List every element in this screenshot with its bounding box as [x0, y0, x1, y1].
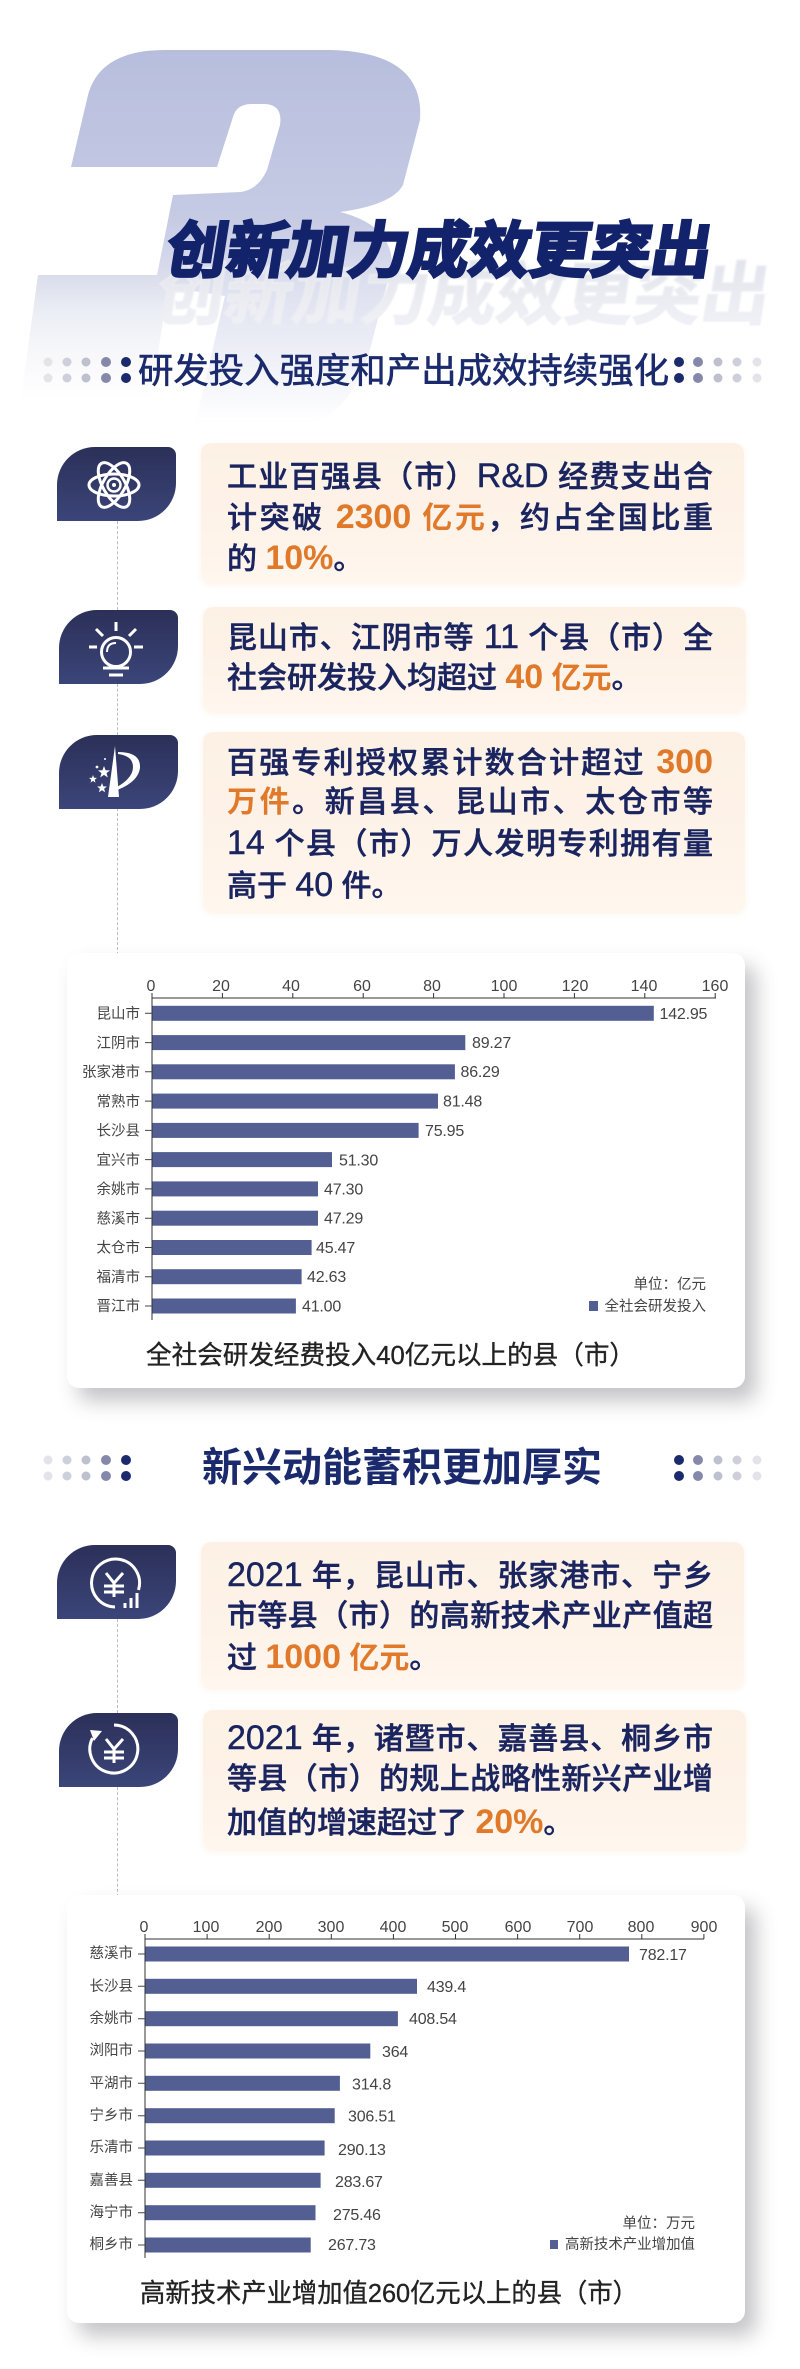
text: R&D spending line 2: 计突破 2300 亿元，约占全国比重 [227, 498, 713, 536]
bar chart: R&D investment: 120 [562, 978, 588, 995]
bar chart: high-tech value added: 嘉善县 [90, 2172, 133, 2189]
bar chart: R&D investment: 长沙县 [96, 1123, 140, 1140]
bar chart: R&D investment: 福清市 [96, 1269, 140, 1286]
text: R&D investment line 2: 社会研发投入均超过 40 亿元。 [227, 658, 642, 696]
bar chart: high-tech value added: 长沙县 [90, 1978, 133, 1995]
bar chart: high-tech value added: 高新技术产业增加值 [565, 2236, 695, 2253]
bar chart: R&D investment: 全社会研发经费投入40亿元以上的县（市） [146, 1340, 635, 1370]
bar chart: high-tech value added: 364 [382, 2044, 408, 2061]
subtitle: 研发投入: 研发投入强度和产出成效持续强化 [138, 351, 669, 391]
bar chart: R&D investment: 张家港市 [82, 1064, 140, 1081]
bar chart: high-tech value added: 900 [691, 1919, 717, 1936]
text: R&D spending line 3: 的 10%。 [227, 539, 363, 577]
bar chart: high-tech value added: 慈溪市 [90, 1945, 133, 1962]
text: R&D investment: 昆山市、江阴市等 11 个县（市）全 [227, 618, 713, 656]
bar chart: R&D investment: 80 [423, 978, 441, 995]
bar chart: high-tech value added: 800 [628, 1919, 654, 1936]
bar chart: R&D investment: 75.95 [425, 1123, 464, 1140]
bar chart: high-tech value added: 439.4 [427, 1979, 466, 1996]
text: patents line 4: 高于 40 件。 [227, 866, 402, 904]
heading: 新兴动能: 新兴动能蓄积更加厚实 [202, 1446, 602, 1490]
icon: atom [57, 447, 176, 521]
bar chart: R&D investment: 单位：亿元 [634, 1276, 706, 1293]
text: emerging industry growth line 2: 等县（市）的规上战略性新兴产业增 [227, 1763, 713, 1796]
text: emerging industry growth line 3: 加值的增速超过了 20%。 [227, 1803, 573, 1841]
bar chart: R&D investment: 20 [212, 978, 230, 995]
bar chart: R&D investment: 42.63 [307, 1269, 346, 1286]
bar chart: high-tech value added: 267.73 [328, 2237, 376, 2254]
bar chart: high-tech value added: 400 [380, 1919, 406, 1936]
bar chart: high-tech value added: 782.17 [639, 1947, 687, 1964]
text: patents line 2: 万件。新昌县、昆山市、太仓市等 [227, 786, 713, 819]
text: patents line 3: 14 个县（市）万人发明专利拥有量 [227, 824, 713, 862]
bar chart: high-tech value added: 单位：万元 [622, 2215, 695, 2232]
bar chart: high-tech value added: 0 [140, 1919, 149, 1936]
bar chart: R&D investment: 86.29 [460, 1064, 500, 1081]
bar chart: high-tech value added: 浏阳市 [90, 2042, 133, 2059]
text: high-tech output: 2021 年，昆山市、张家港市、宁乡 [227, 1556, 713, 1594]
bar chart: R&D investment: 45.47 [316, 1240, 355, 1257]
icon: yuan with bars [57, 1545, 176, 1619]
bar chart: high-tech value added: 100 [193, 1919, 219, 1936]
bar chart: high-tech value added: 275.46 [333, 2207, 381, 2224]
panel: R&D investment [203, 607, 746, 712]
icon: light bulb [59, 610, 178, 684]
bar chart: high-tech value added: 平湖市 [90, 2075, 133, 2092]
panel: R&D spending [201, 443, 744, 583]
bar chart: R&D investment: 160 [702, 978, 728, 995]
bar chart: R&D investment [82, 978, 728, 1370]
bar chart: R&D investment: 太仓市 [96, 1240, 140, 1257]
bar chart: high-tech value added: 290.13 [338, 2142, 386, 2159]
bar chart: R&D investment: 慈溪市 [96, 1210, 140, 1227]
title: 创新加力成效更突出 [162, 217, 718, 286]
bar chart: high-tech value added: 宁乡市 [90, 2107, 133, 2124]
bar chart: high-tech value added: 283.67 [335, 2174, 383, 2191]
heading: 新兴动能 [44, 1446, 762, 1490]
text: patents: 百强专利授权累计数合计超过 300 [227, 743, 713, 781]
icon: yuan with arrow [59, 1713, 178, 1787]
bar chart: R&D investment: 昆山市 [96, 1006, 140, 1022]
text: high-tech output line 2: 市等县（市）的高新技术产业产值超 [227, 1600, 713, 1633]
text: high-tech output line 3: 过 1000 亿元。 [227, 1638, 439, 1676]
bar chart: high-tech value added: 乐清市 [90, 2139, 133, 2156]
bar chart: R&D investment: 全社会研发投入 [604, 1297, 706, 1315]
panel: chart R&D investment [67, 953, 745, 1388]
bar chart: R&D investment: 0 [147, 978, 156, 995]
bar chart: R&D investment: 81.48 [443, 1094, 482, 1110]
bar chart: R&D investment: 常熟市 [96, 1093, 140, 1110]
bar chart: high-tech value added: 海宁市 [90, 2204, 133, 2221]
text: emerging industry growth: 2021 年，诸暨市、嘉善县、桐乡市 [227, 1719, 713, 1757]
bar chart: R&D investment: 100 [491, 978, 517, 995]
bar chart: R&D investment: 140 [631, 978, 657, 995]
bar chart: high-tech value added: 300 [318, 1919, 344, 1936]
bar chart: high-tech value added: 314.8 [352, 2076, 391, 2094]
bar chart: high-tech value added: 306.51 [348, 2108, 396, 2126]
bar chart: R&D investment: 晋江市 [96, 1298, 140, 1315]
panel: emerging industry growth [203, 1710, 746, 1850]
bar chart: high-tech value added: 600 [505, 1919, 531, 1936]
bar chart: high-tech value added: 200 [256, 1919, 282, 1936]
bar chart: high-tech value added: 408.54 [409, 2011, 457, 2028]
bar chart: R&D investment: 41.00 [302, 1298, 341, 1316]
bar chart: R&D investment: 宜兴市 [96, 1152, 140, 1169]
bar chart: R&D investment: 47.29 [324, 1210, 363, 1228]
panel: high-tech output [201, 1542, 744, 1688]
bar chart: R&D investment: 142.95 [660, 1006, 708, 1023]
bar chart: R&D investment: 47.30 [324, 1182, 363, 1198]
icon: patent mark [59, 735, 178, 809]
panel: chart high-tech value added [67, 1895, 745, 2323]
bar chart: high-tech value added [90, 1919, 717, 2308]
bar chart: high-tech value added: 高新技术产业增加值260亿元以上的县（市） [140, 2278, 638, 2308]
panel: patents [203, 732, 745, 912]
bar chart: R&D investment: 51.30 [339, 1152, 378, 1170]
bar chart: R&D investment: 余姚市 [96, 1180, 140, 1198]
text: R&D spending: 工业百强县（市）R&D 经费支出合 [227, 457, 713, 495]
title shadow: 创新加力成效更突出 [151, 257, 776, 333]
bar chart: high-tech value added: 余姚市 [90, 2009, 133, 2027]
bar chart: high-tech value added: 700 [567, 1919, 593, 1936]
bar chart: high-tech value added: 500 [442, 1919, 468, 1936]
bar chart: R&D investment: 89.27 [472, 1035, 511, 1052]
bar chart: high-tech value added: 桐乡市 [90, 2236, 133, 2253]
header background numeral 3 [28, 50, 420, 390]
bar chart: R&D investment: 60 [353, 978, 371, 995]
bar chart: R&D investment: 40 [282, 978, 300, 995]
bar chart: R&D investment: 江阴市 [96, 1035, 140, 1052]
